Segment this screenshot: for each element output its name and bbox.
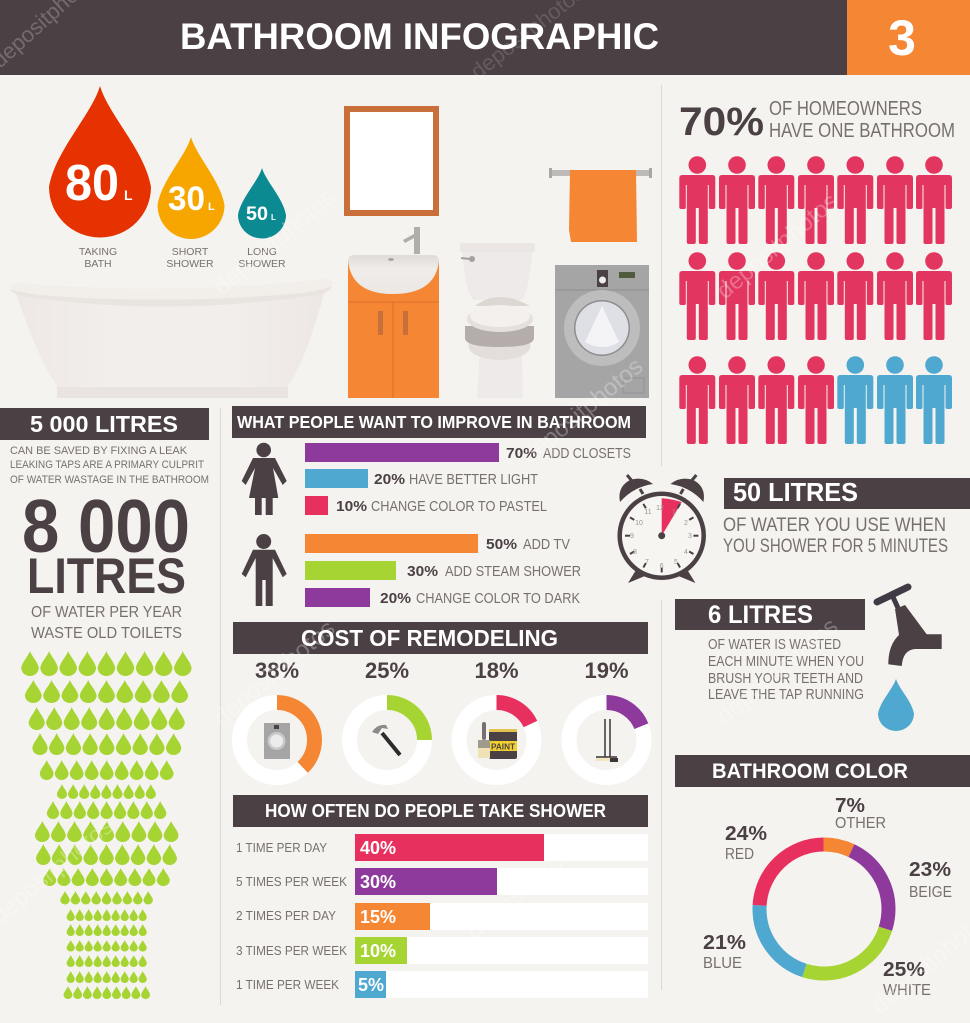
left column: 5000 litres: 5 000 LITRES	[30, 411, 178, 437]
callout: 6 litres: LEAVE THE TAP RUNNING	[708, 687, 864, 703]
drop: 50 L long shower: LONG	[247, 246, 277, 258]
bar: 30%	[236, 868, 648, 895]
dividers	[220, 85, 662, 1005]
label: other	[835, 795, 886, 832]
icon: alarm clock: 7	[645, 559, 649, 566]
drop: 30 L short shower	[158, 137, 224, 270]
panel: how often do people take shower: HOW OFTEN DO PEOPLE TAKE SHOWER	[265, 800, 606, 821]
bar chart: men: ADD TV	[523, 536, 570, 553]
watermarks: depositphotos	[712, 613, 843, 730]
bar chart: men: 20%	[380, 590, 411, 607]
label: red: RED	[725, 846, 754, 863]
label: other: 7%	[835, 795, 865, 817]
label: beige: 23%	[909, 859, 951, 881]
donut chart	[760, 844, 888, 974]
heading	[233, 622, 648, 654]
icon: alarm clock: 1	[672, 509, 676, 516]
drop: 30 L short shower: L	[208, 201, 215, 213]
watermarks: depositphotos	[712, 188, 843, 305]
label: beige	[909, 859, 952, 901]
bar: 5%: 5%	[358, 975, 384, 995]
icon: alarm clock: 2	[684, 520, 688, 527]
icon: alarm clock: 5	[674, 559, 678, 566]
bar chart: men: 50%	[486, 536, 517, 553]
donut: 18% paint: 18%	[474, 658, 519, 683]
watermarks: depositphotos	[462, 828, 593, 945]
icon: tap with drop	[877, 587, 942, 731]
bar: 10%: 3 TIMES PER WEEK	[236, 944, 348, 958]
bar chart: women: 10%	[336, 498, 367, 515]
bar: 40%: 1 TIME PER DAY	[236, 841, 328, 855]
bar chart: men: ADD STEAM SHOWER	[445, 563, 581, 580]
drop: 30 L short shower: SHOWER	[166, 258, 214, 270]
bar chart: women: 70%	[506, 445, 537, 462]
stat: 70% of homeowners: OF HOMEOWNERS	[769, 98, 922, 120]
bar: 15%	[236, 903, 648, 930]
left column: 8000 litres: 8 000	[22, 484, 190, 568]
watermarks: depositphotos	[209, 184, 340, 301]
bar: 30%: 5 TIMES PER WEEK	[236, 875, 348, 889]
donut: 19% mop	[569, 658, 644, 778]
icon: man	[242, 534, 287, 606]
drop: 80 L taking bath: 80	[65, 154, 119, 211]
left column: 5000 litres	[0, 408, 209, 486]
callout: 6 litres: OF WATER IS WASTED	[708, 637, 841, 653]
callout: 6 litres: EACH MINUTE WHEN YOU	[708, 654, 864, 670]
bar: 40%: 40%	[360, 838, 396, 858]
heading	[232, 406, 646, 438]
drop: 30 L short shower: 30	[168, 180, 205, 218]
left column: 8000 litres: OF WATER PER YEAR	[31, 604, 182, 621]
bar chart: women: CHANGE COLOR TO PASTEL	[371, 498, 547, 515]
drop: 30 L short shower: SHORT	[172, 246, 209, 258]
donut: 25% hammer: 25%	[365, 658, 409, 683]
drop: 80 L taking bath	[49, 86, 151, 270]
donut: 18% paint	[459, 658, 534, 778]
bar chart: men	[305, 534, 581, 607]
illustration: mirror	[344, 106, 439, 216]
panel: how often do people take shower	[233, 795, 648, 998]
panel: bathroom color	[675, 755, 970, 999]
label: blue	[703, 932, 746, 972]
icon: alarm clock: 10	[635, 520, 643, 527]
icon: alarm clock: 11	[644, 509, 652, 516]
left column: 8000 litres: LITRES	[27, 548, 186, 604]
toilet made of green drops	[21, 651, 192, 999]
watermarks: depositphotos	[517, 353, 648, 470]
heading	[0, 408, 209, 440]
illustration: towel on rail	[549, 168, 652, 242]
icon: alarm clock: 9	[630, 533, 634, 540]
pictogram: people	[679, 156, 952, 444]
donut: 18% paint: PAINT	[491, 742, 515, 752]
water drops comparison	[49, 86, 286, 270]
left column: 8000 litres: WASTE OLD TOILETS	[31, 625, 182, 642]
bar chart: women: HAVE BETTER LIGHT	[409, 471, 538, 488]
left column: 8000 litres	[22, 484, 190, 642]
description: CAN BE SAVED BY FIXING A LEAK	[10, 445, 188, 457]
donut: 19% mop: 19%	[584, 658, 629, 683]
stat: 70% of homeowners: 70%	[679, 100, 764, 144]
icon: alarm clock	[619, 475, 704, 583]
icon: alarm clock: 3	[688, 533, 692, 540]
icon: woman	[242, 443, 287, 515]
donut: 25% hammer	[350, 658, 424, 778]
illustration: toilet	[460, 243, 535, 398]
drop: 80 L taking bath: BATH	[84, 258, 112, 270]
label: beige: BEIGE	[909, 884, 952, 901]
heading	[233, 795, 648, 827]
bar: 10%: 10%	[360, 941, 396, 961]
donut: 38% washer	[240, 658, 314, 778]
icon: alarm clock: 8	[633, 549, 637, 556]
left column: 5000 litres: OF WATER WASTAGE IN THE BATHROOM	[10, 474, 209, 486]
drop: 50 L long shower: SHOWER	[238, 258, 286, 270]
drop: 80 L taking bath: L	[124, 187, 133, 203]
label: blue: BLUE	[703, 955, 742, 972]
bar chart: women: ADD CLOSETS	[543, 445, 631, 462]
bar chart: women: 20%	[374, 471, 405, 488]
panel: cost of remodeling: COST OF REMODELING	[301, 625, 558, 651]
icon: alarm clock: 4	[684, 549, 688, 556]
callout: 6 litres: 6 LITRES	[708, 601, 813, 629]
left column: 5000 litres: LEAKING TAPS ARE A PRIMARY CULPRIT	[10, 459, 204, 471]
bar: 40%	[236, 834, 648, 861]
label: blue: 21%	[703, 932, 746, 954]
label: white	[883, 959, 931, 999]
panel: what people want to improve: WHAT PEOPLE WANT TO IMPROVE IN BATHROOM	[237, 412, 631, 432]
bar chart: men: CHANGE COLOR TO DARK	[416, 590, 580, 607]
bar: 30%: 30%	[360, 872, 396, 892]
drop: 50 L long shower: L	[271, 213, 276, 222]
callout: 50 litres	[723, 477, 970, 557]
illustration: washing machine	[555, 265, 649, 398]
bar: 10%	[236, 937, 648, 964]
illustration: bathtub	[9, 279, 333, 398]
panel: cost of remodeling	[233, 622, 648, 778]
drop: 50 L long shower: 50	[246, 204, 268, 225]
icon: alarm clock: 12	[656, 505, 664, 512]
callout: 6 litres	[675, 599, 865, 703]
bar: 15%: 2 TIMES PER DAY	[236, 909, 337, 923]
label: red: 24%	[725, 823, 767, 845]
panel: bathroom color: BATHROOM COLOR	[712, 760, 908, 783]
callout: 50 litres: 50 LITRES	[733, 477, 858, 507]
watermarks: depositphotos	[209, 615, 340, 732]
illustration: sink cabinet	[348, 227, 439, 398]
callout: 6 litres: BRUSH YOUR TEETH AND	[708, 671, 863, 687]
donut: 38% washer: 38%	[255, 658, 299, 683]
icon: alarm clock: 6	[660, 563, 664, 570]
panel: what people want to improve	[232, 406, 646, 607]
label: white: WHITE	[883, 982, 931, 999]
label: white: 25%	[883, 959, 925, 981]
label: red	[725, 823, 767, 863]
bar chart: women	[305, 443, 631, 515]
title: BATHROOM INFOGRAPHIC	[180, 16, 659, 57]
drop: 80 L taking bath: TAKING	[79, 246, 117, 258]
callout: 50 litres: OF WATER YOU USE WHEN	[723, 515, 946, 536]
heading	[675, 755, 970, 787]
bar: 5%: 1 TIME PER WEEK	[236, 978, 340, 992]
drop: 50 L long shower	[238, 168, 286, 270]
bar: 15%: 15%	[360, 907, 396, 927]
label: other: OTHER	[835, 815, 886, 832]
page number: 3	[888, 10, 916, 66]
bar: 5%	[236, 971, 648, 998]
stat: 70% of homeowners	[679, 98, 955, 144]
bar chart: men: 30%	[407, 563, 438, 580]
header bar	[0, 0, 970, 84]
